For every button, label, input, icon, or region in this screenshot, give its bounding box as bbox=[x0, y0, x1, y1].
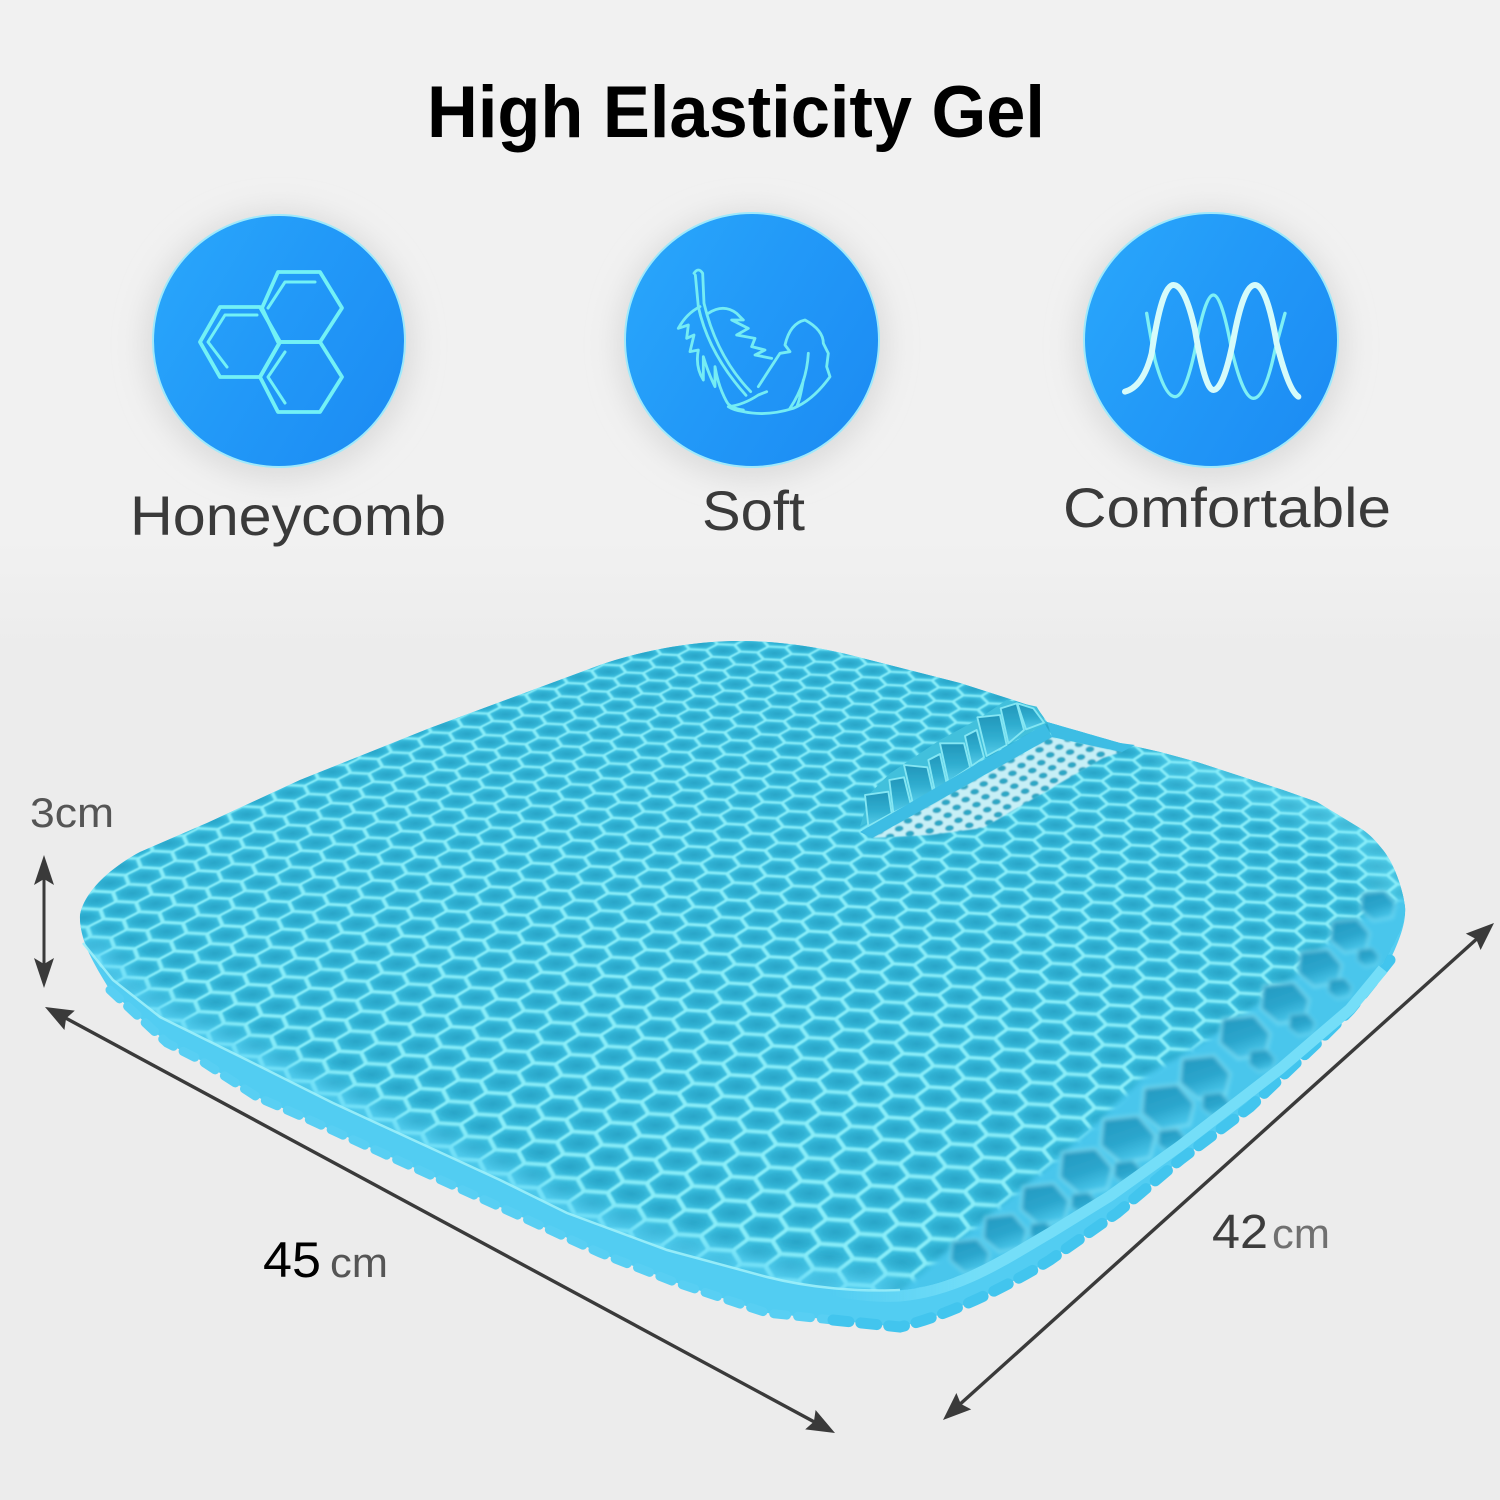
deformed band covering the regular lattice bbox=[890, 895, 1410, 1310]
label: Honeycomb: Honeycomb bbox=[130, 484, 446, 547]
label: 45 cm bbox=[263, 1232, 388, 1288]
lighter cells beside the rim and upper-right glow bbox=[83, 752, 1410, 1310]
rim highlight bands bbox=[83, 943, 1383, 1296]
label: 42 cm: cm bbox=[1272, 1210, 1330, 1257]
label: 45 cm: cm bbox=[330, 1239, 388, 1286]
surface shading, deformed cells and seat groove bbox=[82, 700, 1406, 1302]
gel cushion bbox=[80, 641, 1406, 1333]
label: Soft: Soft bbox=[702, 479, 805, 542]
seat groove band bbox=[860, 722, 1135, 838]
icon: feather bbox=[625, 213, 879, 467]
arrow: height bbox=[34, 855, 54, 988]
honeycomb surface bbox=[80, 641, 1406, 1290]
label: 45 cm: 45 bbox=[263, 1232, 321, 1288]
label: 3cm: 3cm bbox=[30, 789, 114, 836]
icon: honeycomb bbox=[153, 215, 405, 467]
mesh seat cut-out bbox=[872, 737, 1122, 838]
label: 42 cm: 42 bbox=[1212, 1206, 1268, 1259]
title: High Elasticity Gel bbox=[427, 72, 1045, 153]
deformed cells along the right edge bbox=[950, 891, 1396, 1273]
label: Comfortable: Comfortable bbox=[1063, 476, 1391, 539]
label: 42 cm bbox=[1212, 1206, 1330, 1259]
deep cells above the groove bbox=[860, 700, 1047, 827]
arrow: 42 cm depth bbox=[943, 923, 1494, 1420]
icon: comfort waves bbox=[1084, 213, 1338, 467]
arrow: 45 cm width bbox=[45, 1007, 835, 1433]
